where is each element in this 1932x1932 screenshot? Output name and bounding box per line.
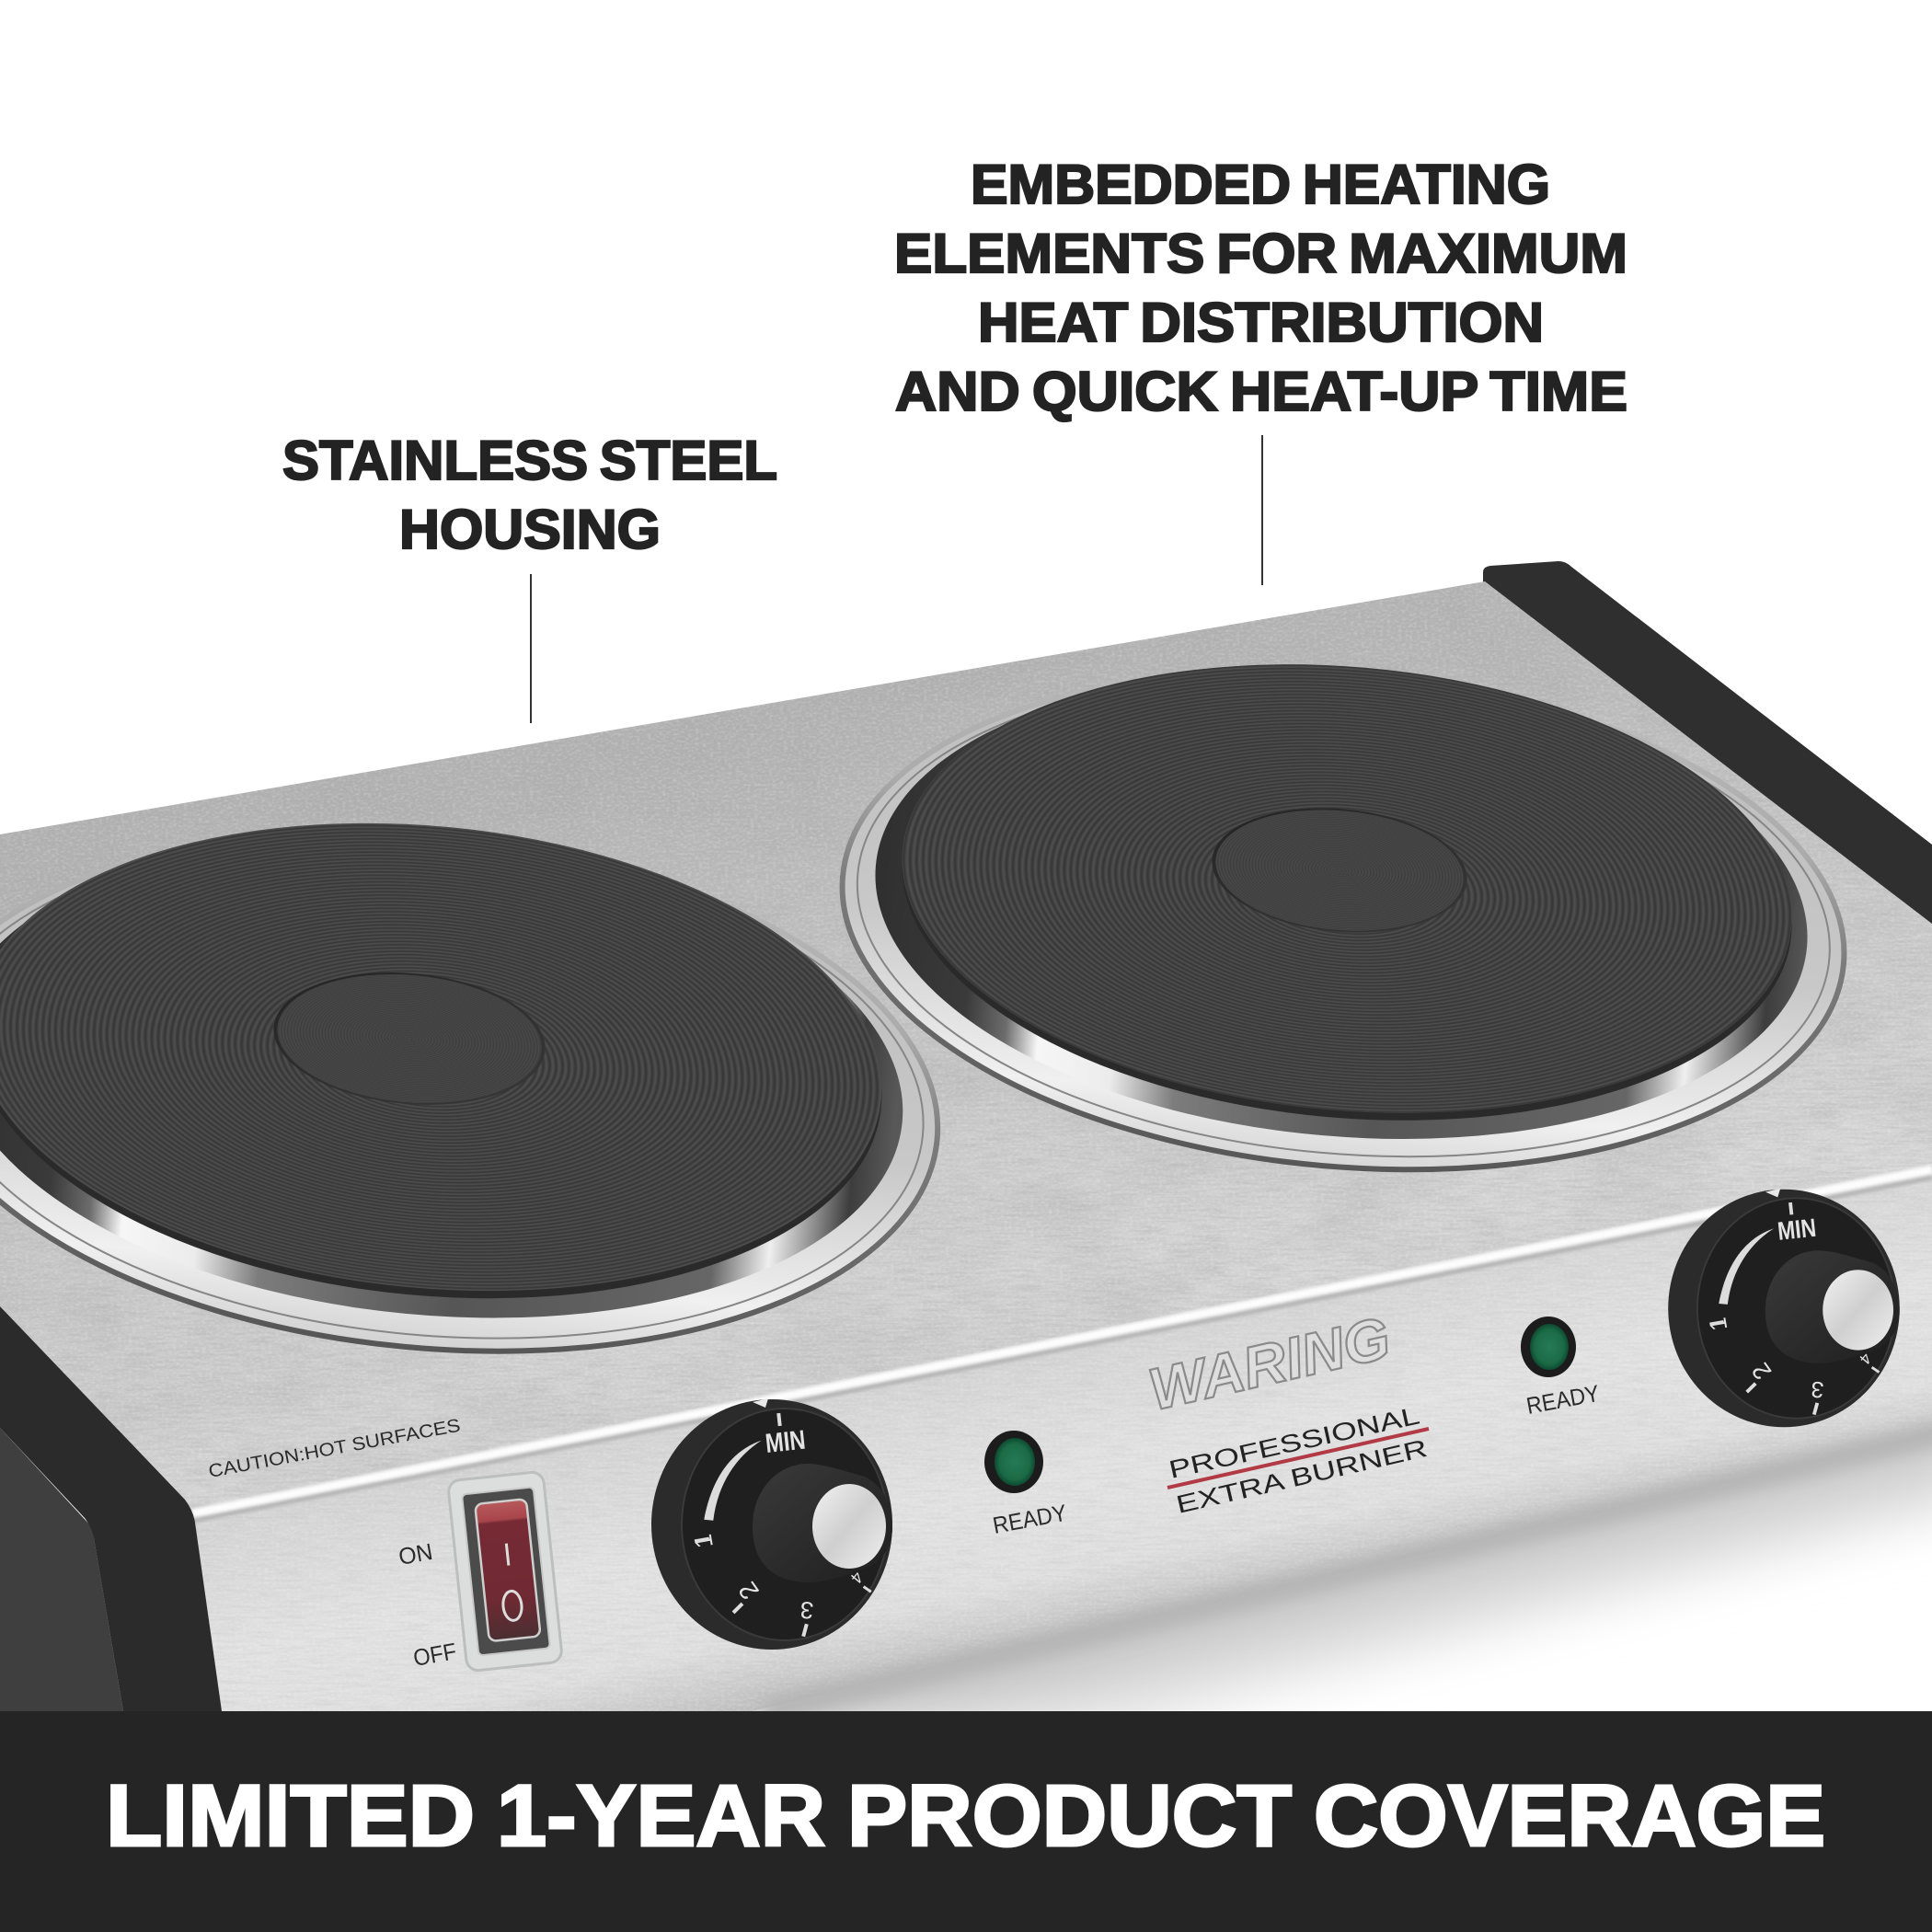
banner title: LIMITED [106,1767,475,1865]
dial labels: MIN [1777,1214,1818,1246]
knob [753,1464,892,1582]
ready LED left [984,1431,1043,1493]
power rocker switch [447,1471,563,1672]
professional text: PROFESSIONAL [1167,1401,1422,1484]
dial labels [1705,1202,1880,1415]
dial labels: 3 [1810,1376,1825,1402]
shadow under product [589,1408,1932,1730]
knob cap [812,1484,886,1569]
plate edge left [0,792,903,1337]
dial labels: 4 [1856,1350,1876,1368]
dial labels: MIN [764,1424,807,1459]
dial labels: 3 [799,1596,815,1625]
dial right [1668,1189,1900,1427]
plate left [0,785,903,1329]
plate edge right [883,637,1811,1156]
heading: embedded heating elements: EMBEDDED HEATING [971,154,1550,215]
dial labels: 1 [689,1532,719,1550]
heading: embedded heating elements: HEAT DISTRIBUTION [978,292,1544,353]
dial left [651,1398,892,1650]
ready LED right [1521,1317,1576,1377]
ready label right: READY [1524,1381,1602,1420]
label ON: ON [397,1539,435,1570]
banner title: PRODUCT [847,1767,1292,1865]
heading: stainless steel housing [282,430,777,560]
dial arc [1719,1228,1774,1305]
heading: stainless steel housing: HOUSING [399,499,661,560]
extra burner text: EXTRA BURNER [1174,1434,1430,1519]
banner title [106,1767,1825,1865]
stainless top plate [0,581,1932,1509]
knob [1765,1250,1900,1363]
knob cap [1823,1270,1893,1351]
centre disc right [1209,799,1470,941]
dial labels: 2 [733,1577,765,1604]
dial labels: 2 [1746,1358,1777,1385]
label OFF: OFF [411,1639,458,1672]
heading: embedded heating elements: ELEMENTS FOR MAXIMUM [894,223,1627,284]
dial labels: 4 [846,1568,867,1587]
left black end strip [0,1306,222,1711]
bottom banner [0,1711,1932,1932]
left dark side [0,1428,123,1711]
callout line: heating elements [1261,435,1263,585]
heading: embedded heating elements [894,154,1627,422]
dial arc [704,1441,762,1521]
dial labels [689,1413,872,1637]
caution text: CAUTION:HOT SURFACES [207,1416,462,1482]
plate right [883,629,1811,1148]
ready label left: READY [991,1501,1069,1539]
red rule [1167,1429,1429,1488]
banner title: 1-YEAR [497,1767,825,1865]
banner title: COVERAGE [1314,1767,1825,1865]
dial labels: 1 [1705,1316,1732,1333]
centre disc left [270,962,549,1115]
front control panel [190,1165,1932,1711]
heading: embedded heating elements: AND QUICK HEAT-UP TIME [895,361,1627,422]
heading: stainless steel housing: STAINLESS STEEL [282,430,777,491]
callout line: housing [530,574,532,723]
burner right [822,629,1865,1210]
right black end strip [1483,561,1932,926]
panel lower edge shading [764,1432,1932,1711]
waring logo: WARING [1143,1305,1396,1423]
panel fold highlight [192,1169,1932,1521]
burner left [0,785,961,1395]
